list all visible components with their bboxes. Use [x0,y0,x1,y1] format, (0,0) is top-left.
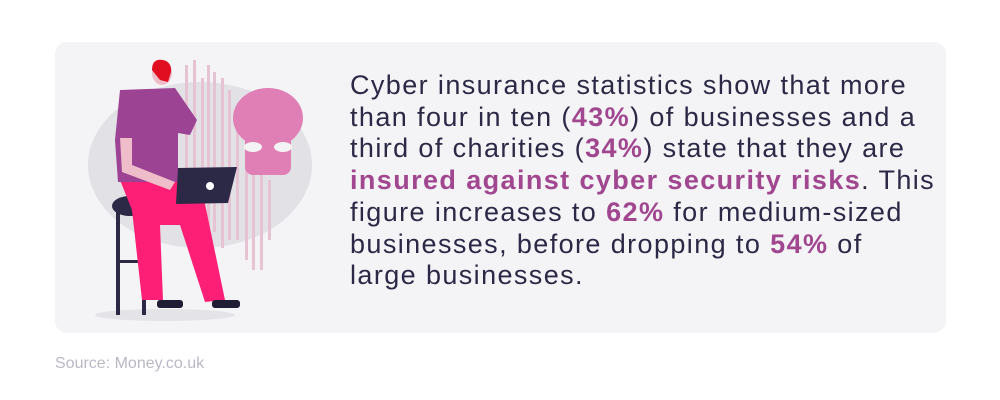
illustration: man with laptop and skull [88,60,312,321]
text block: third of charities (34%) state that they are [350,133,905,163]
source: Source: Money.co.uk [55,355,204,372]
text block: large businesses. [350,260,584,290]
head [152,61,172,85]
icon: skull [233,88,303,175]
laptop [176,167,237,204]
blob background [88,82,312,248]
stool [112,196,148,315]
text block: insured against cyber security risks. This [350,165,935,195]
arm [120,138,175,190]
text block: figure increases to 62% for medium-sized [350,197,903,227]
text block [350,70,935,290]
panel: main card [55,42,946,333]
text block: than four in ten (43%) of businesses and a [350,102,916,132]
torso [115,88,197,182]
shadow [95,309,235,321]
code rain [185,60,271,270]
text block: Cyber insurance statistics show that more [350,70,907,100]
shoes [157,300,183,308]
text block: businesses, before dropping to 54% of [350,229,863,259]
legs [120,180,225,302]
